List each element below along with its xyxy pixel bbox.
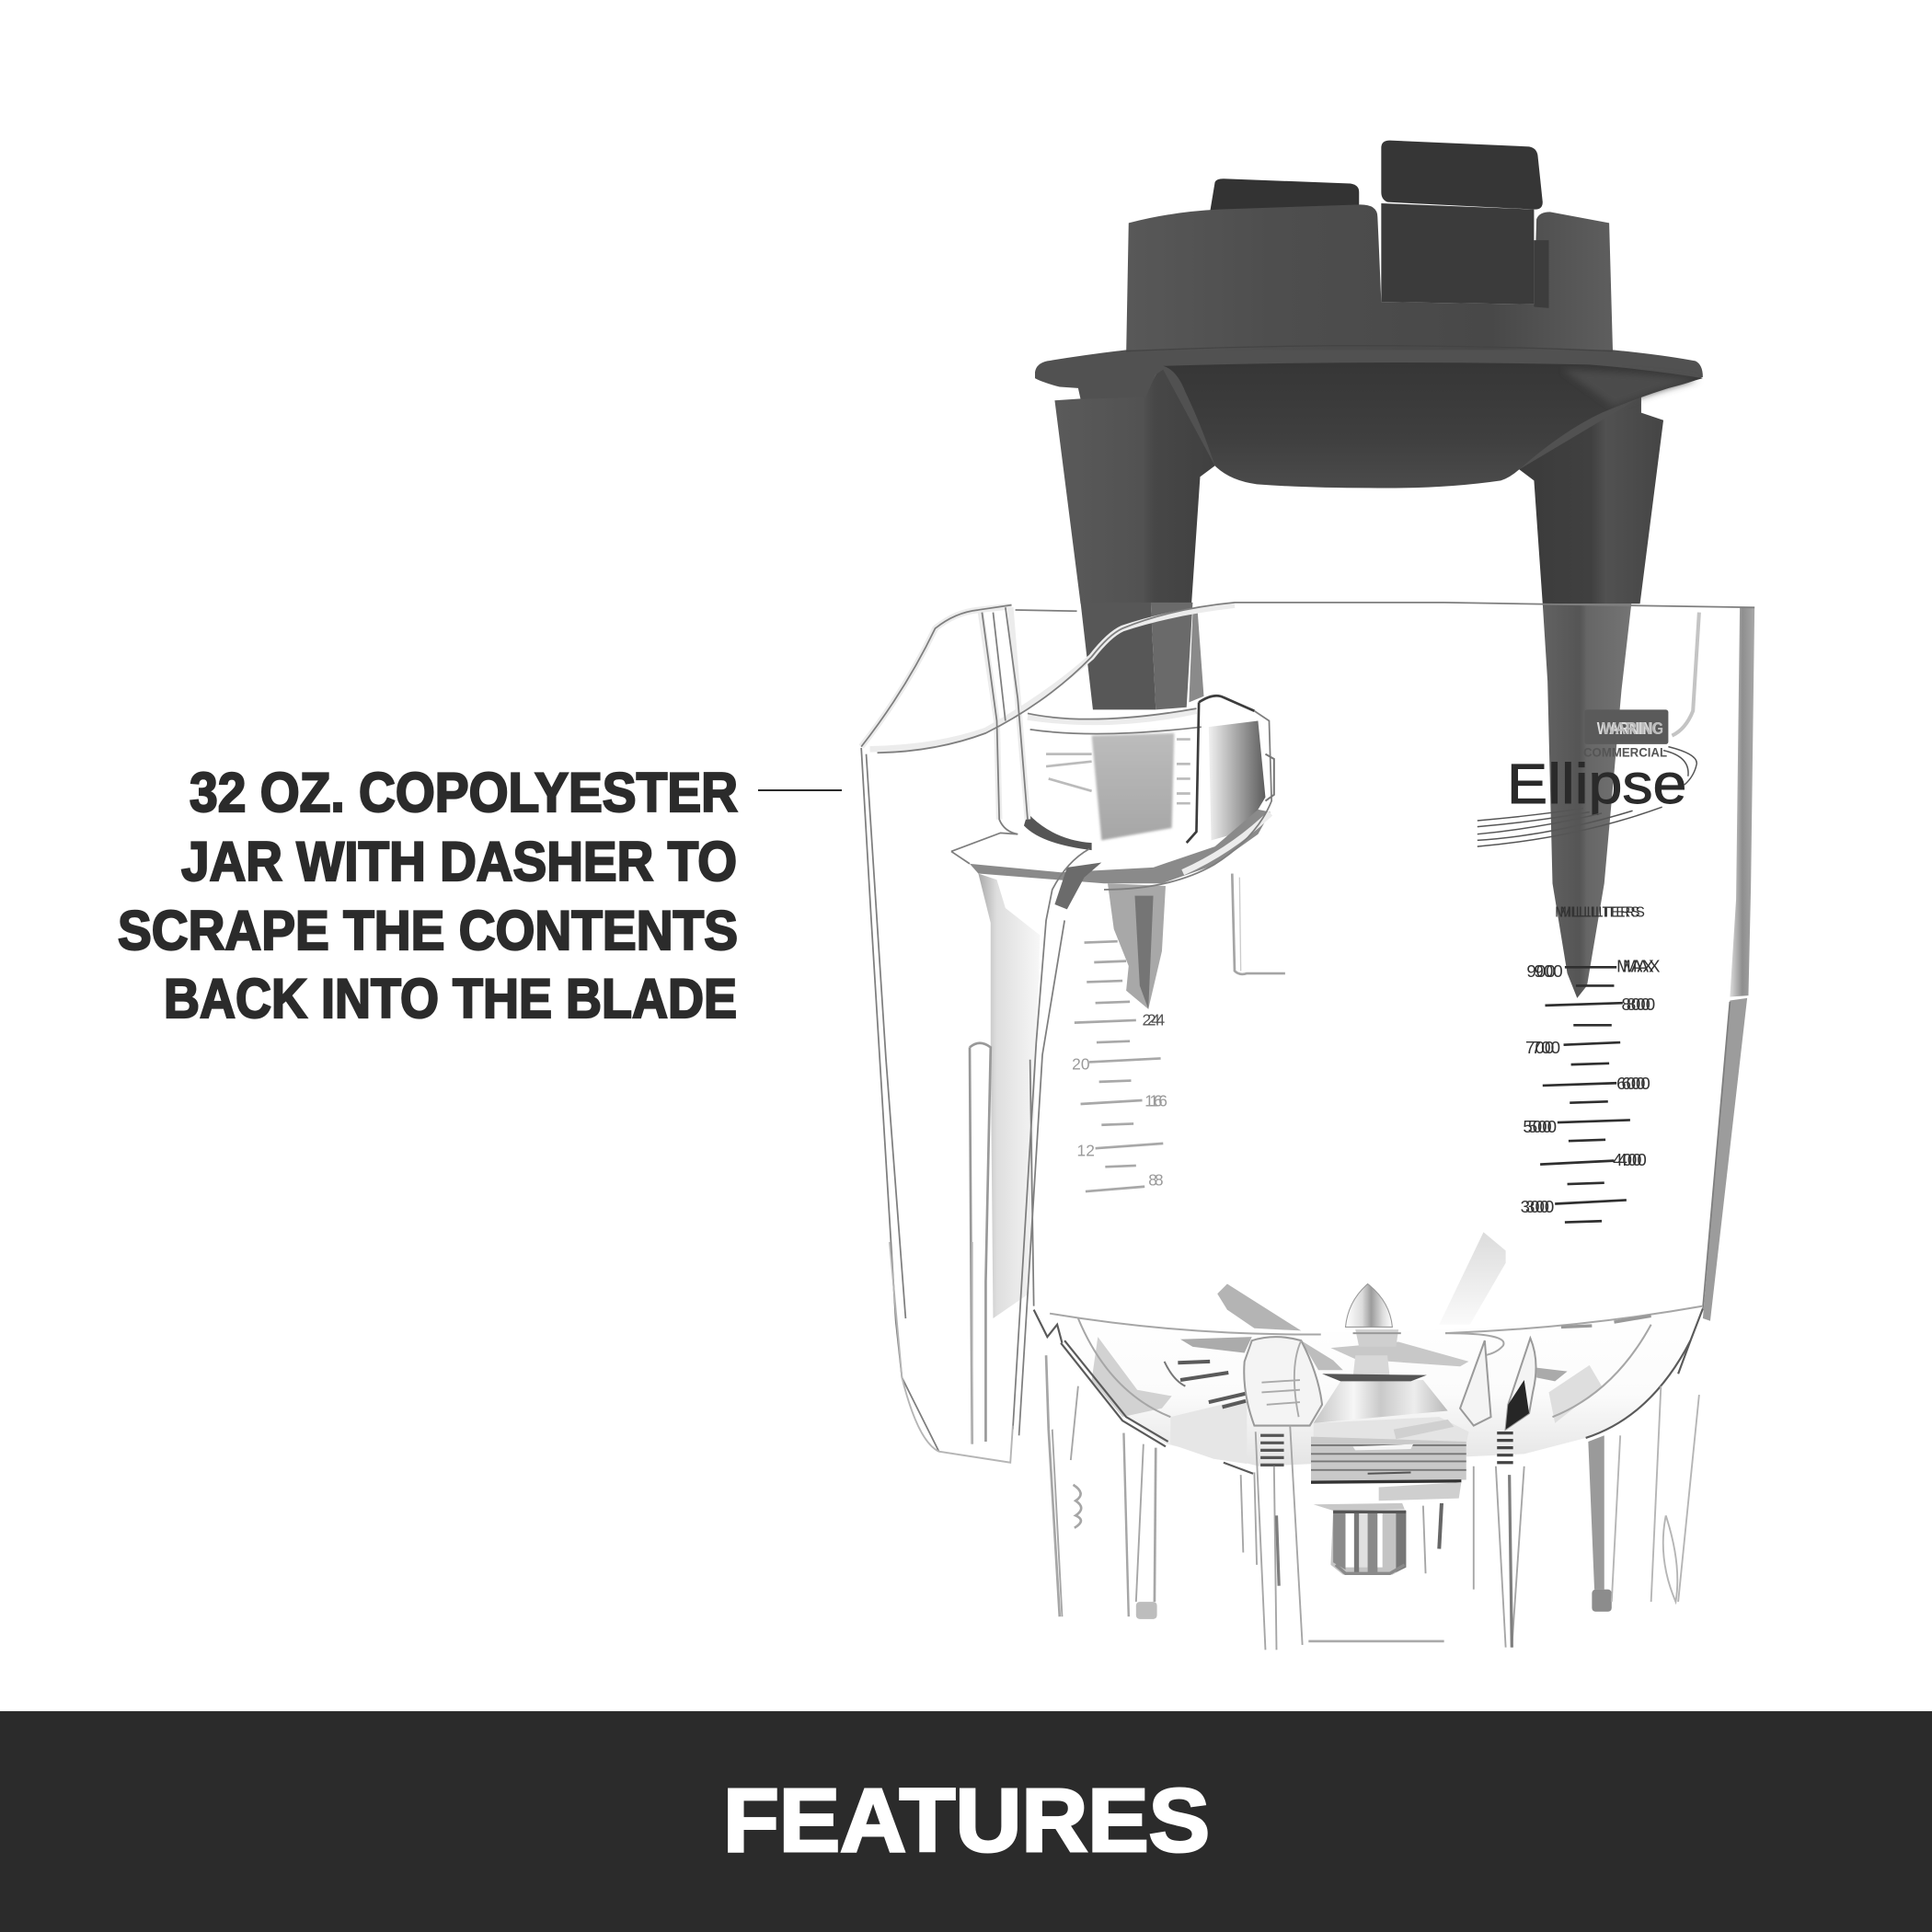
right leg seen through glass	[1543, 604, 1631, 998]
millilitre scale labels: 600	[1616, 1074, 1645, 1093]
callout leader line	[758, 789, 842, 791]
jar rim highlights	[861, 605, 1271, 872]
rear small tab	[1210, 178, 1359, 212]
callout text	[118, 762, 738, 1029]
handle grip pill	[970, 1043, 991, 1444]
millilitre scale labels: 400	[1613, 1150, 1641, 1169]
grey reflection in spout cup	[1092, 733, 1174, 840]
millilitre scale markings	[1540, 967, 1630, 1223]
right flange highlight	[1562, 370, 1698, 407]
right lower body strip	[1703, 998, 1747, 1321]
centre foot dark accents	[1277, 1475, 1512, 1648]
dasher lid: dark grey cap with legs	[1035, 141, 1703, 604]
ounce scale labels: 16	[1144, 1092, 1163, 1110]
hub shaft	[1353, 1355, 1390, 1377]
dark wedge right clamp	[1506, 1380, 1529, 1430]
right top strip	[1730, 607, 1754, 996]
right foot tip	[1592, 1590, 1612, 1612]
grip side tabs	[1265, 754, 1274, 801]
cup base dark crescent	[1024, 813, 1092, 850]
centre foot bottom edge	[1308, 1640, 1444, 1642]
millilitre scale labels: 500	[1528, 1117, 1557, 1136]
millilitre scale labels: 700	[1525, 1038, 1554, 1057]
ghost logo in cup	[1046, 740, 1190, 803]
left clamp teeth	[1260, 1435, 1284, 1465]
angled blade	[1301, 1340, 1343, 1370]
product: blender jar with dasher	[861, 141, 1754, 1650]
right horizontal blade	[1536, 1368, 1568, 1381]
ounce scale labels: 12	[1077, 1141, 1095, 1159]
lower left bowl shade	[1170, 1398, 1247, 1464]
millilitre scale labels: MAX	[1616, 957, 1654, 976]
bowl rim lines	[1050, 1306, 1703, 1417]
left foot	[1046, 1355, 1156, 1616]
right foot lines	[1612, 1386, 1699, 1602]
dark refraction right of cup	[1209, 720, 1265, 840]
millilitre scale labels: 600	[1622, 1074, 1650, 1093]
callout text: BACK INTO THE BLADE	[164, 968, 737, 1029]
right clamp teeth	[1497, 1433, 1513, 1463]
ounce scale labels: 20	[1072, 1055, 1090, 1074]
left foot tip	[1136, 1602, 1157, 1619]
millilitre scale labels: 500	[1523, 1117, 1552, 1136]
ounce scale labels: 24	[1147, 1010, 1166, 1029]
centre foot	[1241, 1426, 1524, 1650]
top right inner fold	[1672, 613, 1699, 736]
millilitre scale labels: MILLILITERS	[1560, 904, 1645, 920]
flange top crease	[1126, 346, 1613, 351]
blade spindle washer	[1355, 1329, 1398, 1347]
hex nut	[1379, 1482, 1461, 1501]
blade bullet nut	[1346, 1284, 1392, 1327]
hub dark band	[1322, 1374, 1427, 1381]
disk under nut	[1314, 1503, 1405, 1511]
slot edge	[1534, 240, 1548, 308]
recessed slot	[1381, 203, 1534, 305]
ounce scale labels: 24	[1143, 1010, 1160, 1029]
dasher left leg	[1054, 366, 1215, 604]
handle grey reflection strip	[978, 874, 1040, 1318]
millilitre scale labels: 300	[1525, 1197, 1554, 1216]
raised top tab	[1381, 141, 1543, 210]
rear post	[1232, 874, 1285, 974]
handle foot	[890, 1242, 1013, 1463]
warning box	[1584, 709, 1668, 744]
underside dish	[1163, 362, 1703, 489]
upper left blade	[1217, 1284, 1301, 1330]
footer heading: FEATURES	[723, 1770, 1210, 1870]
cylinder collar	[1126, 204, 1613, 355]
lower dark band of the grip	[970, 810, 1271, 883]
millilitre scale labels: 700	[1532, 1038, 1560, 1057]
callout: jar description	[118, 762, 842, 1029]
flat plate	[1314, 1417, 1468, 1444]
lower blade plate	[1330, 1341, 1468, 1366]
millilitre scale labels: 900	[1526, 961, 1556, 981]
drive spline	[1330, 1511, 1407, 1575]
left leg seen through glass	[1081, 603, 1156, 709]
fin inner fold	[1261, 1340, 1301, 1417]
right foot dark bar	[1588, 1435, 1604, 1590]
flange rim	[1035, 350, 1703, 469]
callout text: SCRAPE THE CONTENTS	[118, 900, 738, 961]
hub cone	[1314, 1380, 1448, 1423]
glass jar body	[861, 603, 1754, 1463]
callout text: JAR WITH DASHER TO	[181, 831, 737, 892]
ounce scale labels: 16	[1150, 1092, 1167, 1110]
millilitre scale labels: 400	[1617, 1150, 1647, 1169]
right bowl facet	[1548, 1365, 1602, 1423]
bowl edge dark lines	[1034, 1308, 1703, 1474]
brand logo printed on jar: COMMERCIAL	[1583, 745, 1667, 759]
brand logo printed on jar: WARING	[1602, 719, 1663, 738]
dark cup side line	[1187, 696, 1254, 843]
logo swoosh	[1478, 747, 1696, 846]
thick right rim highlight	[1561, 1316, 1651, 1327]
left leg side strip	[1189, 613, 1203, 702]
base bowl	[1050, 1306, 1703, 1466]
ounce scale labels: 8	[1148, 1170, 1157, 1189]
dasher right leg	[1519, 397, 1663, 604]
collar bands	[1311, 1437, 1466, 1481]
ounce scale labels	[1072, 1010, 1167, 1189]
jar base with blade assembly	[1034, 1284, 1703, 1575]
millilitre scale labels: MILLILITERS	[1555, 904, 1640, 920]
millilitre scale labels: 800	[1627, 995, 1655, 1014]
brand logo printed on jar	[1478, 709, 1696, 846]
jar outline strokes	[861, 603, 1754, 1452]
ounce scale labels: 8	[1155, 1170, 1164, 1189]
rear refracted blade	[1439, 1232, 1506, 1325]
left leg inner strip	[1151, 603, 1192, 709]
brand logo printed on jar: WARNING	[1597, 719, 1663, 738]
millilitre scale labels: 900	[1534, 961, 1563, 981]
millilitre scale labels	[1521, 904, 1661, 1216]
glitter at grip neck	[1054, 863, 1101, 909]
clamp fins	[1244, 1337, 1536, 1430]
refracted dasher tip	[1108, 883, 1166, 1009]
Ellipse wordmark: Ellipse	[1507, 753, 1686, 816]
lower etched ticks	[1178, 1362, 1246, 1407]
ounce scale markings	[1075, 941, 1163, 1191]
dasher tip shade	[1134, 896, 1154, 1009]
callout text: 32 OZ. COPOLYESTER	[190, 762, 738, 823]
millilitre scale labels: 800	[1622, 995, 1650, 1014]
millilitre scale labels: MAX	[1623, 957, 1661, 976]
millilitre scale labels: 300	[1521, 1197, 1549, 1216]
jar feet	[1046, 1355, 1699, 1650]
left bowl facet	[1092, 1337, 1172, 1417]
left horizontal blade	[1180, 1337, 1252, 1353]
footer band	[0, 1711, 1932, 1932]
